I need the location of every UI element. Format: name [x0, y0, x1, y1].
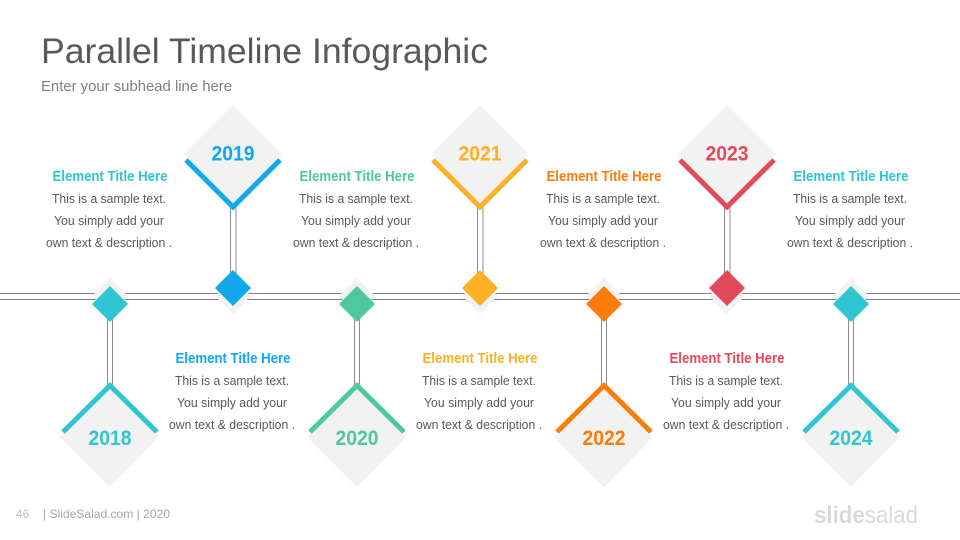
text block: 2023 lower: own text & description . [663, 418, 789, 432]
text block: 2018 upper: own text & description . [46, 236, 172, 250]
text block: 2021 lower [416, 351, 542, 432]
footer page number: 46 [16, 507, 30, 521]
milestone 2024: 2024 [830, 427, 873, 450]
milestone 2019: 2019 [212, 142, 254, 166]
text block: 2022 upper: You simply add your [548, 214, 658, 228]
milestone 2020 [307, 278, 406, 487]
text block: 2023 lower: Element Title Here [670, 351, 784, 367]
text block: 2023 lower: This is a sample text. [669, 374, 783, 388]
text block: 2020 upper: own text & description . [293, 236, 419, 250]
text block: 2018 upper: You simply add your [54, 214, 164, 228]
milestone 2023 [678, 105, 776, 314]
milestone 2023: 2023 [706, 142, 748, 166]
text block: 2018 upper: This is a sample text. [52, 192, 166, 206]
text block: 2022 upper: own text & description . [540, 236, 666, 250]
text block: 2024 upper: This is a sample text. [793, 192, 907, 206]
milestone 2022: 2022 [582, 427, 626, 450]
text block: 2020 upper: This is a sample text. [299, 192, 413, 206]
text block: 2019 lower [169, 351, 295, 432]
milestone 2019 [184, 105, 282, 314]
text block: 2024 upper: own text & description . [787, 236, 913, 250]
text block: 2024 upper [787, 169, 913, 250]
text block: 2020 upper [293, 169, 419, 250]
logo wordmark: slidesalad [814, 502, 918, 529]
text block: 2020 upper: You simply add your [301, 214, 411, 228]
text block: 2021 lower: This is a sample text. [422, 374, 536, 388]
text block: 2019 lower: You simply add your [177, 396, 287, 410]
text block: 2019 lower: own text & description . [169, 418, 295, 432]
footer source: | SlideSalad.com | 2020 [43, 507, 170, 521]
title: Parallel Timeline Infographic [41, 32, 488, 71]
milestone 2021 [431, 105, 529, 314]
text block: 2024 upper: You simply add your [795, 214, 905, 228]
text block: 2024 upper: Element Title Here [794, 169, 908, 185]
text block: 2021 lower: Element Title Here [422, 351, 538, 367]
text block: 2022 upper: This is a sample text. [546, 192, 660, 206]
text block: 2022 upper [540, 169, 666, 250]
text block: 2023 lower: You simply add your [671, 396, 781, 410]
milestone 2018 [60, 278, 159, 487]
milestone 2022 [554, 278, 653, 487]
milestone 2018: 2018 [88, 427, 132, 450]
text block: 2018 upper [46, 169, 172, 250]
text block: 2019 lower: This is a sample text. [175, 374, 289, 388]
text block: 2023 lower [663, 351, 789, 432]
text block: 2022 upper: Element Title Here [546, 169, 662, 185]
milestone 2020: 2020 [336, 427, 378, 450]
timeline rail [0, 294, 960, 300]
text block: 2021 lower: own text & description . [416, 418, 542, 432]
text block: 2020 upper: Element Title Here [300, 169, 414, 185]
subhead: Enter your subhead line here [41, 79, 232, 95]
text block: 2021 lower: You simply add your [424, 396, 534, 410]
text block: 2019 lower: Element Title Here [176, 351, 290, 367]
milestone 2021: 2021 [458, 142, 502, 166]
milestone 2024 [801, 278, 900, 487]
text block: 2018 upper: Element Title Here [52, 169, 168, 185]
